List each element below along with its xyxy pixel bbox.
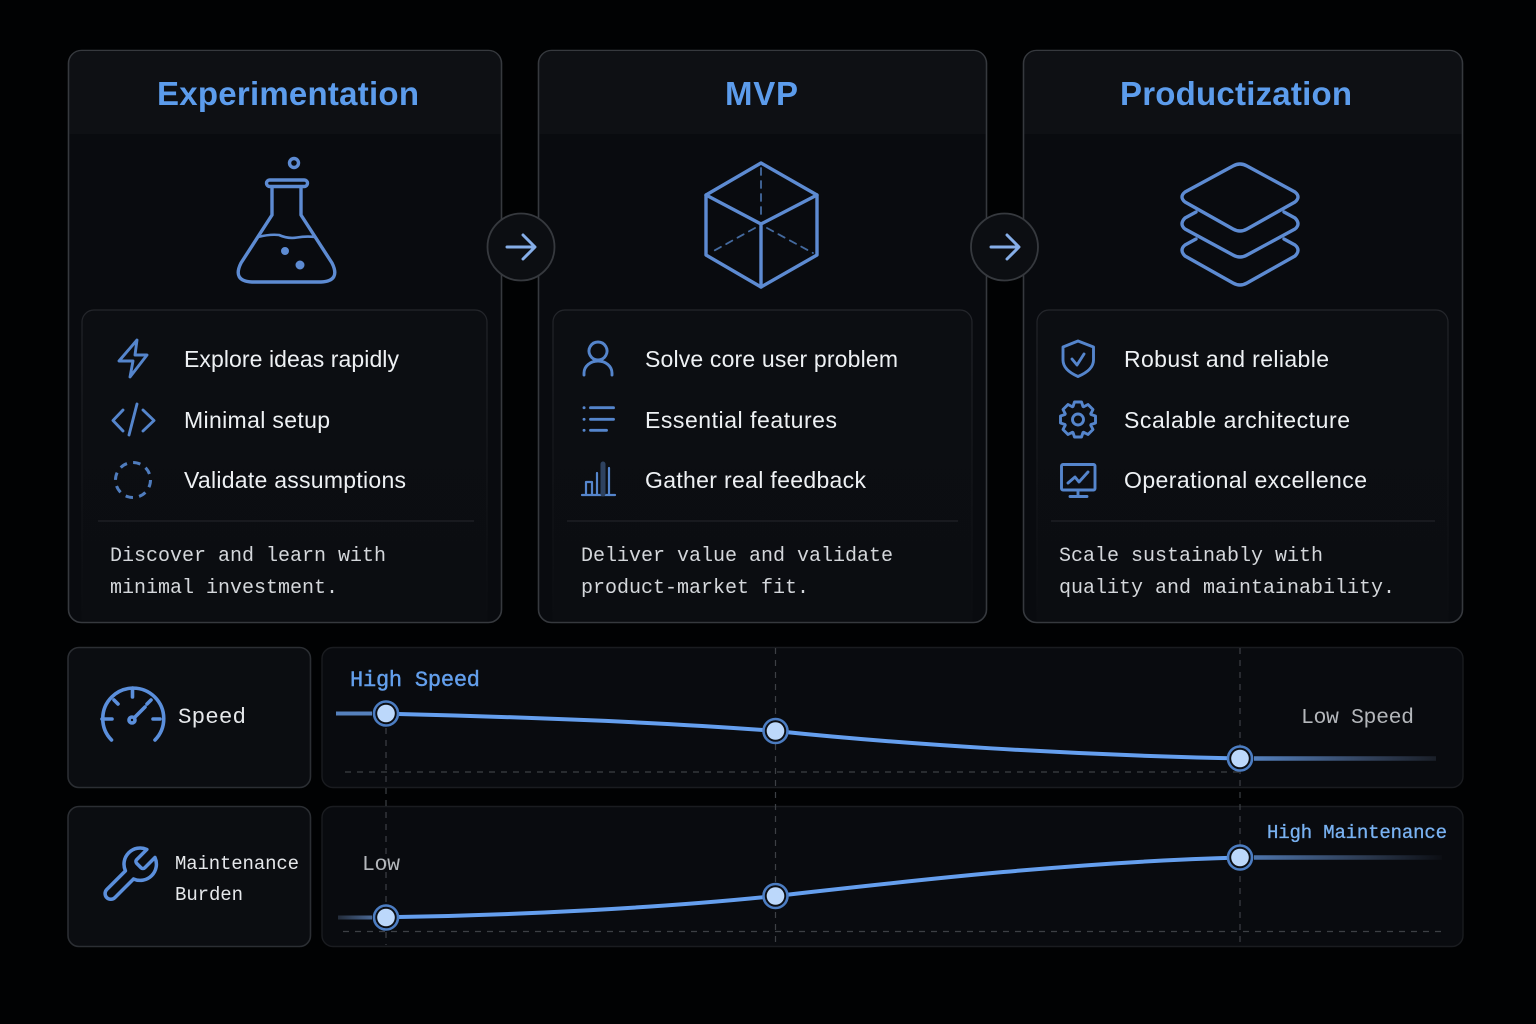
caption: Experimentation: Discover and learn with	[110, 545, 386, 568]
caption: Productization: Scale sustainably with	[1059, 545, 1323, 568]
icon: speedometer	[102, 688, 164, 740]
heading: Experimentation: Experimentation	[157, 75, 419, 112]
text: Minimal setup: Minimal setup	[184, 407, 330, 433]
arrow: Experimentation to MVP	[488, 214, 554, 280]
label: Low: Low	[362, 853, 400, 877]
panel: Productization	[1024, 50, 1462, 622]
panel: MVP	[538, 50, 986, 622]
header band: Productization	[1024, 51, 1462, 134]
node: Speed middle	[764, 719, 788, 743]
feature panel: Experimentation	[82, 310, 487, 621]
header band: MVP	[540, 51, 986, 134]
node: Speed start	[374, 702, 398, 726]
text: Solve core user problem: Solve core user problem	[645, 346, 898, 372]
heading: MVP: MVP	[725, 75, 798, 112]
text: Gather real feedback: Gather real feedback	[645, 467, 866, 493]
text: Validate assumptions: Validate assumptions	[184, 467, 406, 493]
chart panel: Speed	[322, 648, 1463, 788]
caption: MVP: product-market fit.	[581, 577, 809, 600]
feature panel: MVP	[553, 310, 972, 621]
chart: Maintenance line	[338, 822, 1447, 930]
node: Maintenance middle	[764, 884, 788, 908]
header band: Experimentation	[70, 51, 500, 134]
icon: bar chart	[582, 464, 615, 495]
feature panel: Productization	[1037, 310, 1448, 621]
icon: code brackets	[113, 404, 154, 435]
arrow: MVP to Productization	[971, 214, 1038, 280]
node: Maintenance start	[374, 906, 398, 930]
label: Low Speed: Low Speed	[1301, 706, 1414, 730]
text: Explore ideas rapidly: Explore ideas rapidly	[184, 346, 400, 372]
panel: Experimentation	[68, 50, 502, 622]
label panel: Maintenance Burden	[68, 806, 310, 946]
reference guides	[343, 648, 1442, 945]
icon: flask	[238, 158, 335, 282]
text: Essential features: Essential features	[645, 407, 837, 433]
heading: Productization: Productization	[1120, 75, 1352, 112]
label: Maintenance Burden: Burden	[175, 884, 243, 906]
label: High Maintenance: High Maintenance	[1267, 822, 1447, 844]
label panel: Speed	[68, 648, 310, 788]
divider	[1051, 520, 1435, 522]
icon: list	[584, 408, 614, 430]
chart: Speed line	[336, 668, 1436, 770]
divider	[98, 520, 474, 522]
text: Robust and reliable: Robust and reliable	[1124, 346, 1329, 372]
icon: layers	[1182, 164, 1298, 285]
caption: Productization: quality and maintainability.	[1059, 577, 1395, 600]
icon: lightning bolt	[119, 340, 147, 377]
label: Maintenance Burden: Maintenance	[175, 853, 299, 875]
node: Speed end	[1228, 746, 1252, 770]
text: Operational excellence: Operational excellence	[1124, 467, 1367, 493]
icon: gear	[1060, 402, 1096, 437]
text: Scalable architecture: Scalable architecture	[1124, 407, 1350, 433]
icon: user	[584, 342, 612, 375]
icon: dashed circle	[116, 462, 150, 498]
divider	[567, 520, 958, 522]
caption: Experimentation: minimal investment.	[110, 577, 338, 600]
chart panel: Maintenance	[322, 806, 1463, 946]
label: Speed: Speed	[178, 704, 246, 730]
icon: wrench	[105, 848, 156, 899]
caption: MVP: Deliver value and validate	[581, 545, 893, 568]
icon: monitor chart	[1062, 464, 1095, 496]
icon: shield check	[1063, 341, 1094, 376]
icon: cube	[706, 163, 817, 287]
node: Maintenance end	[1228, 846, 1252, 870]
label: High Speed: High Speed	[350, 668, 480, 693]
